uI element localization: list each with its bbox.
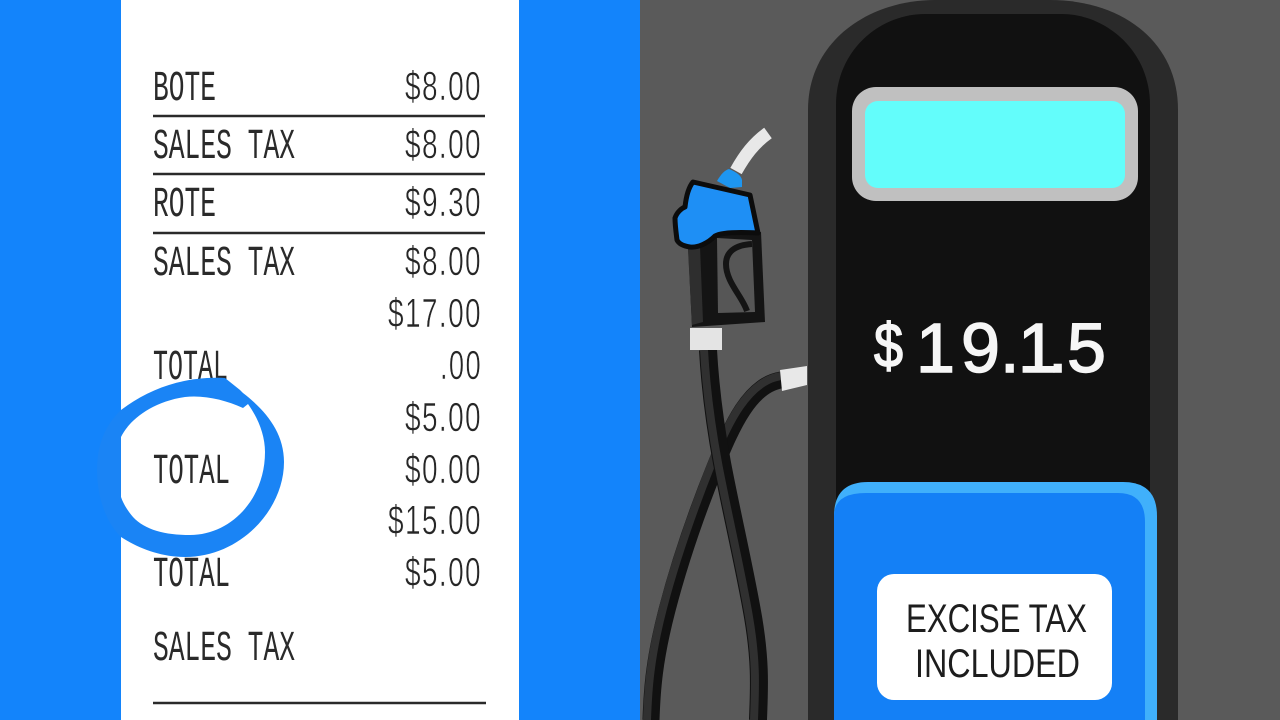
- receipt amount: 5.00: $5.00: [405, 394, 482, 440]
- pump inner face: [836, 14, 1150, 720]
- hose to nozzle: [704, 350, 759, 720]
- receipt row: total 1: [153, 342, 482, 392]
- price reading: $: [874, 312, 903, 381]
- receipt row: total 1: TOTAL: [153, 343, 228, 392]
- highlight circle around total: [97, 378, 284, 557]
- nozzle handle: [688, 232, 765, 327]
- receipt row: total 1: .00: [440, 342, 482, 388]
- receipt row: rote: ROTE: [153, 180, 216, 229]
- receipt amount: 15.00: $15.00: [388, 497, 482, 543]
- pump display screen: [852, 87, 1138, 201]
- excise tax label: EXCISE TAX: [906, 597, 1087, 641]
- nozzle blue head: [675, 182, 758, 247]
- receipt row: circled total: $0.00: [405, 446, 482, 492]
- panel: blue background left: [0, 0, 640, 720]
- price reading: 19.1.5: [916, 309, 1106, 387]
- receipt row: bote: [153, 63, 482, 113]
- panel: receipt: [121, 0, 519, 720]
- receipt row: sales tax 1: SALES TAX: [153, 122, 295, 171]
- receipt amount: 17.00: $17.00: [388, 290, 482, 336]
- receipt row: bote: BOTE: [153, 64, 216, 113]
- pump outer body: [808, 0, 1178, 720]
- receipt row: sales tax 3: SALES TAX: [153, 624, 295, 673]
- trigger guard window: [717, 238, 755, 313]
- blue tax panel: [834, 482, 1157, 720]
- receipt row: sales tax 2: [153, 238, 482, 288]
- receipt row: sales tax 2: SALES TAX: [153, 239, 295, 288]
- hose collar at pump: [780, 366, 807, 391]
- nozzle blue collar: [717, 169, 742, 188]
- fuel pump: [808, 0, 1178, 720]
- excise tax label: INCLUDED: [915, 642, 1080, 686]
- panel: grey background right: [640, 0, 1280, 720]
- receipt row: circled total: [153, 446, 482, 496]
- nozzle spout: [736, 133, 768, 171]
- excise tax label: [877, 574, 1112, 700]
- hose to pump: [647, 376, 781, 720]
- receipt row: bote: $8.00: [405, 63, 482, 109]
- receipt row: rote: [153, 179, 482, 229]
- receipt row: total 3: $5.00: [405, 549, 482, 595]
- receipt row: total 3: [153, 549, 482, 599]
- fuel hose: [647, 350, 807, 720]
- nozzle trigger: [726, 244, 752, 311]
- receipt row: sales tax 1: $8.00: [405, 121, 482, 167]
- receipt row: sales tax 1: [153, 121, 482, 171]
- fuel nozzle: [675, 133, 768, 350]
- receipt row: rote: $9.30: [405, 179, 482, 225]
- receipt row: sales tax 2: $8.00: [405, 238, 482, 284]
- receipt row: total 3: TOTAL: [153, 550, 230, 599]
- receipt row: circled total: TOTAL: [153, 447, 230, 496]
- nozzle white collar: [690, 328, 722, 350]
